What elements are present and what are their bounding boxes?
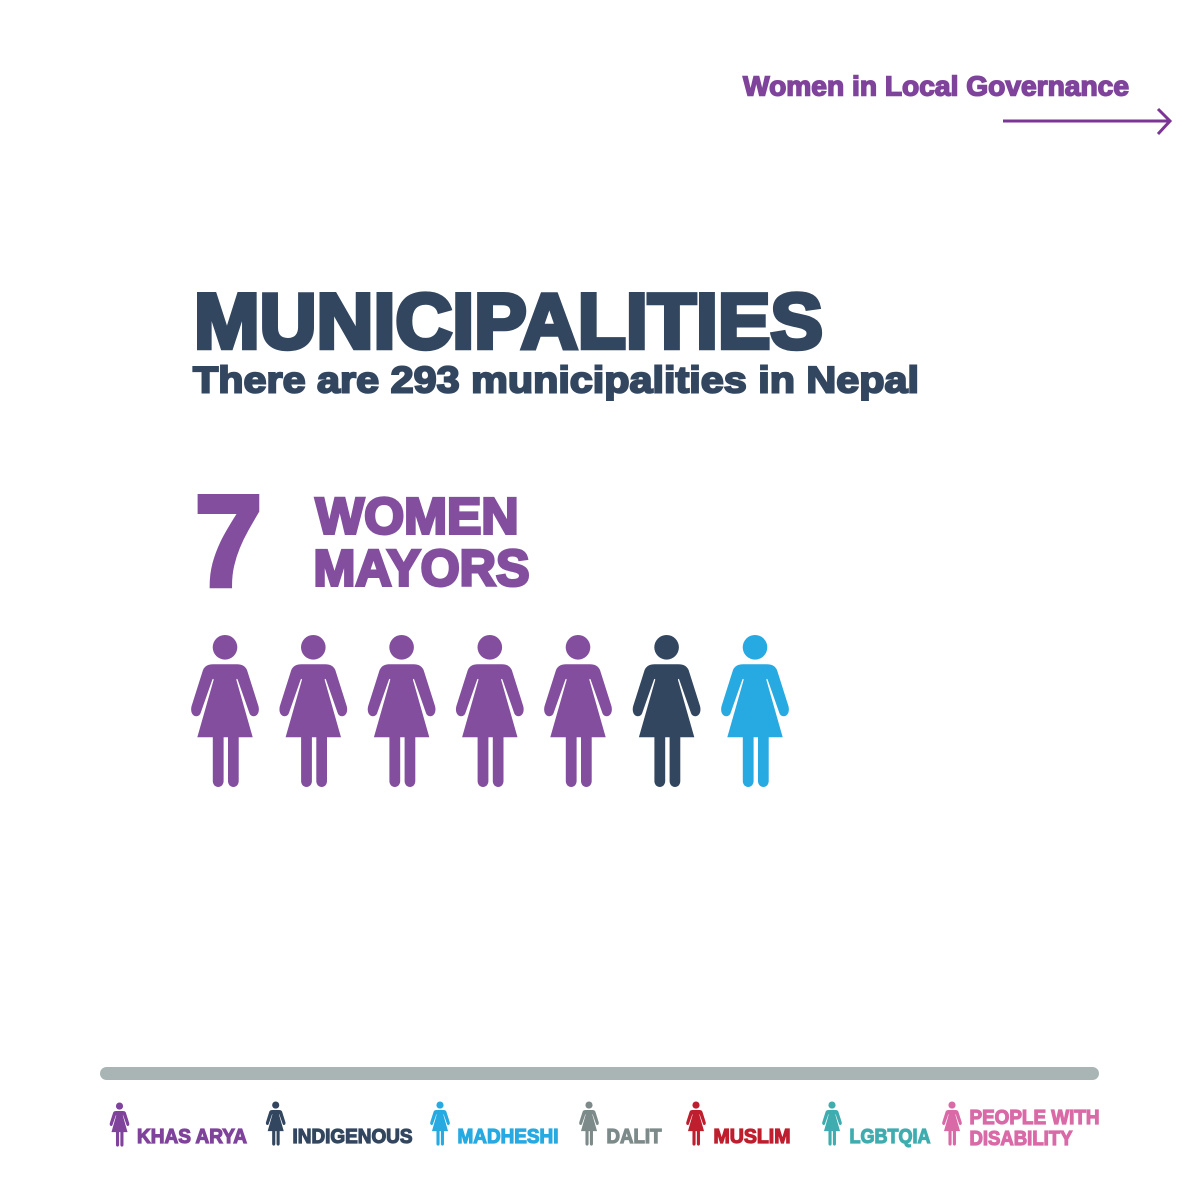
legend: people with disability: DISABILITY [970,1128,1073,1150]
legend: khas arya [110,1102,247,1148]
legend: madheshi [430,1102,558,1148]
women mayors label: WOMEN [316,488,518,544]
women mayors label [314,488,530,596]
legend: people with disability: PEOPLE WITH [970,1107,1100,1129]
legend: dalit [579,1102,662,1148]
arrow [1003,109,1170,134]
legend: lgbtqia: LGBTQIA [850,1126,930,1148]
section header: Women in Local Governance [743,70,1129,102]
legend: muslim [686,1102,790,1148]
pictogram: seven women mayors [191,635,789,787]
legend: indigenous [266,1102,412,1148]
legend: people with disability [942,1102,1100,1150]
legend: madheshi: MADHESHI [458,1126,558,1148]
legend: khas arya: KHAS ARYA [137,1126,247,1148]
title: MUNICIPALITIES [194,277,823,365]
legend: dalit: DALIT [606,1126,662,1148]
legend bar [100,1067,1099,1080]
legend: indigenous: INDIGENOUS [292,1126,412,1148]
legend: lgbtqia [822,1102,930,1148]
legend [110,1102,1100,1150]
big number: 7 [195,470,262,614]
women mayors label: MAYORS [314,540,530,596]
subtitle: There are 293 municipalities in Nepal [193,358,919,400]
legend: muslim: MUSLIM [714,1126,790,1148]
